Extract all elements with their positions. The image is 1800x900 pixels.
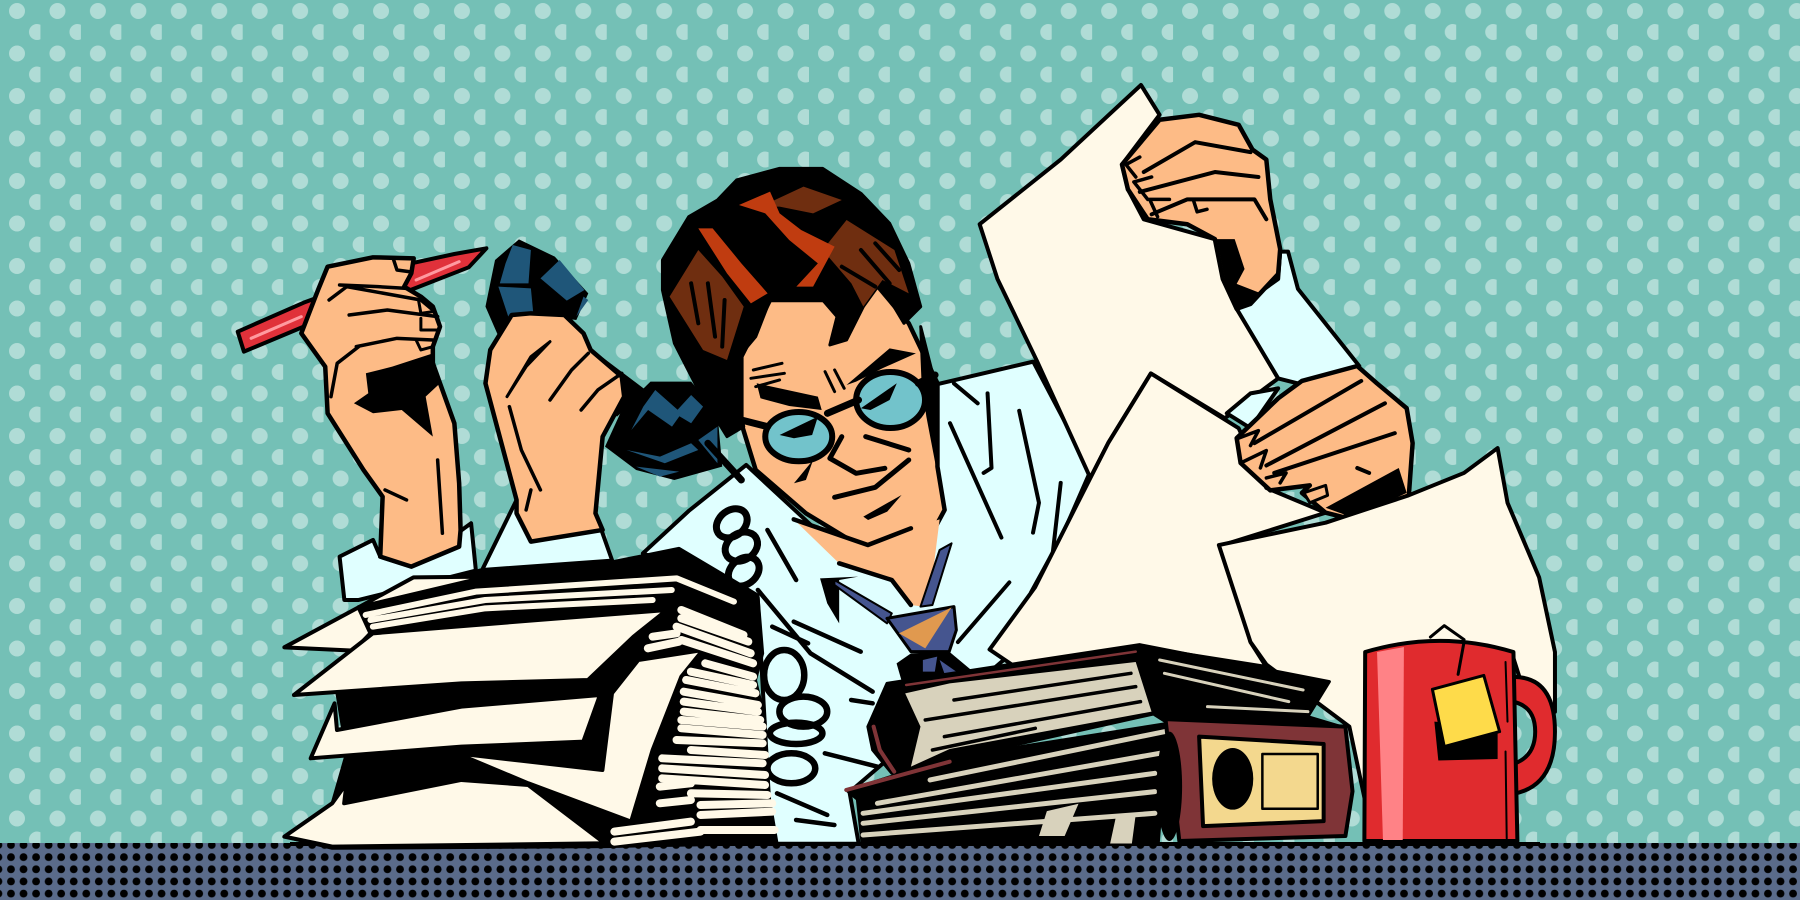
fingernails xyxy=(1239,431,1286,483)
forehead lines xyxy=(751,363,844,392)
pen xyxy=(238,248,486,352)
right shirt cuff xyxy=(482,500,612,570)
shirt folds xyxy=(950,383,1061,642)
lower book pages xyxy=(844,722,1169,845)
fingernails xyxy=(1126,157,1207,217)
left hand holding pen xyxy=(301,257,461,567)
mug handle xyxy=(1513,677,1555,794)
mug xyxy=(1364,626,1555,841)
neck xyxy=(794,519,940,607)
telephone handset xyxy=(485,239,722,480)
sheet: fourth xyxy=(457,650,703,822)
telephone cord, upper xyxy=(708,443,765,589)
telephone cord, lower xyxy=(764,650,827,783)
right side: papers, hands, mug xyxy=(950,85,1555,841)
glasses xyxy=(741,372,935,461)
shirt collar and folds xyxy=(758,519,911,825)
stack page edges xyxy=(614,610,775,842)
lower binder cover xyxy=(1039,719,1353,844)
binder label xyxy=(1199,737,1324,826)
stack of papers, necktie and books xyxy=(284,519,1341,848)
lower right hand xyxy=(1237,366,1413,518)
eyebrows xyxy=(757,348,916,410)
sheet: bottom xyxy=(284,780,605,847)
tea bag xyxy=(1430,626,1500,760)
sheet: top overhang xyxy=(284,577,488,651)
sleeve upper arm xyxy=(1227,252,1359,428)
upper right hand xyxy=(1122,115,1280,309)
paper sheet: front xyxy=(1219,448,1555,801)
necktie xyxy=(834,543,973,680)
hair xyxy=(662,168,921,437)
paper sheet: middle xyxy=(990,373,1326,667)
fingernails xyxy=(416,300,438,350)
sheet: third xyxy=(311,695,600,758)
left shirt cuff xyxy=(340,523,476,600)
top book xyxy=(868,645,1341,773)
binder spine xyxy=(1157,732,1182,841)
face xyxy=(741,283,945,568)
paper sheet: raised xyxy=(980,85,1278,478)
dark right edge of the head xyxy=(921,327,937,467)
shirt torso xyxy=(643,362,1091,844)
hand holding telephone xyxy=(485,313,624,542)
nose and mouth xyxy=(830,437,909,497)
paper pile xyxy=(284,548,777,848)
desk surface xyxy=(0,842,1800,900)
binder tabs xyxy=(1039,804,1136,844)
sheet: second xyxy=(294,610,667,695)
figure: head, arms and telephone xyxy=(238,168,945,600)
